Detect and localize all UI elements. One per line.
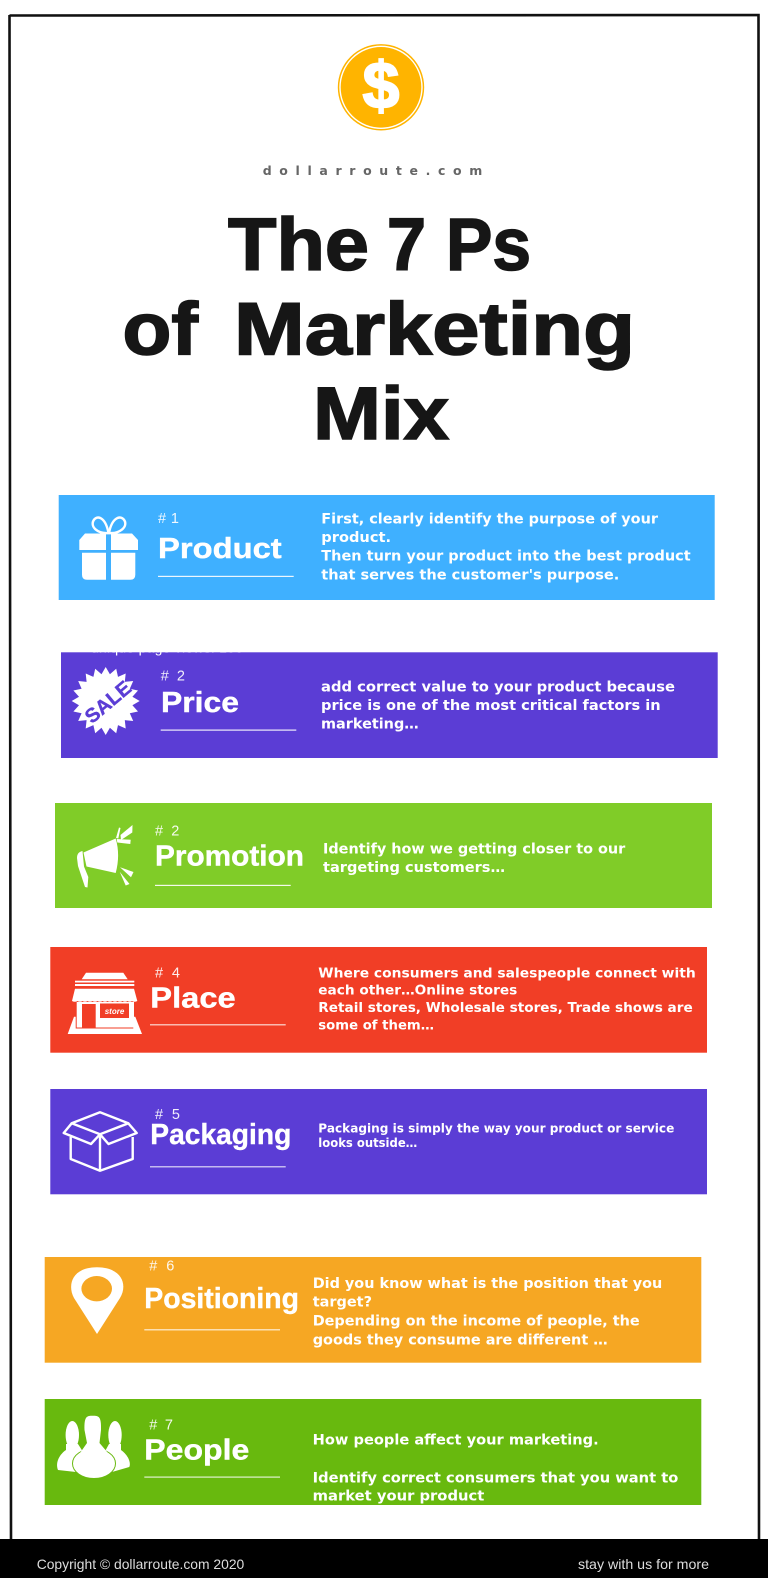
title: The — [228, 203, 369, 286]
text: place description: some of them… — [318, 1017, 434, 1033]
text: product description: Then turn your product into the best product — [321, 549, 691, 565]
text: promotion description: targeting customers… — [323, 860, 505, 876]
heading: Promotion: Promotion — [155, 841, 304, 873]
underline — [155, 885, 291, 886]
panel: People — [45, 1399, 701, 1505]
icon: group of people — [57, 1416, 130, 1478]
icon: map pin — [71, 1267, 123, 1334]
text: positioning description: goods they consume are different … — [313, 1332, 608, 1348]
panel: Product — [59, 495, 715, 600]
icon: sale badge: SALE — [81, 677, 136, 728]
heading: People: People — [144, 1434, 249, 1466]
clipped fragment of text at panel top: unique page views: 100 — [91, 640, 243, 656]
text: product description — [321, 511, 691, 583]
underline — [158, 576, 294, 577]
copyright: Copyright © dollarroute.com 2020 — [37, 1556, 245, 1572]
footer call to action: stay with us for more — [578, 1556, 709, 1572]
icon: store: store — [105, 1007, 125, 1016]
text: positioning description: Did you know what is the position that you — [313, 1276, 662, 1292]
text: place description: Where consumers and salespeople connect with — [318, 965, 696, 981]
title — [122, 203, 635, 455]
panel: Positioning — [45, 1257, 701, 1363]
text: place description — [318, 965, 696, 1033]
text: people description — [313, 1433, 678, 1505]
text: packaging description: Packaging is simply the way your product or service — [318, 1121, 674, 1135]
label: number 5: # 5 — [155, 1107, 180, 1123]
text: place description: each other…Online stores — [318, 983, 517, 999]
heading: Positioning: Positioning — [144, 1283, 299, 1315]
text: positioning description — [313, 1276, 662, 1348]
icon: megaphone — [77, 825, 134, 888]
icon: open box — [64, 1112, 137, 1171]
footer bar — [0, 1539, 768, 1578]
text: packaging description: looks outside… — [318, 1136, 417, 1150]
text: positioning description: target? — [313, 1295, 372, 1311]
logo: dollar coin: $ — [363, 48, 399, 122]
text: promotion description: Identify how we getting closer to our — [323, 841, 626, 857]
heading: Price: Price — [161, 687, 239, 719]
title: Marketing — [234, 288, 635, 370]
text: people description: How people affect your marketing. — [313, 1433, 599, 1449]
text: people description: market your product — [313, 1489, 484, 1505]
logo: dollar coin — [338, 44, 424, 130]
icon: gift box — [79, 518, 138, 580]
text: price description: marketing… — [321, 717, 419, 733]
panel: Price — [61, 640, 718, 758]
icon: sale badge — [72, 667, 140, 735]
heading: Packaging: Packaging — [150, 1119, 291, 1151]
label: number 1: # 1 — [158, 511, 179, 527]
text: price description: price is one of the most critical factors in — [321, 698, 661, 714]
site name: dollarroute.com — [263, 163, 482, 178]
text: positioning description: Depending on the income of people, the — [313, 1314, 640, 1330]
icon: store — [68, 973, 142, 1034]
panel: Packaging — [50, 1089, 707, 1194]
text: product description: product. — [321, 530, 391, 546]
text: price description — [321, 679, 675, 733]
underline — [150, 1166, 286, 1167]
underline — [144, 1329, 280, 1330]
title: of — [122, 288, 198, 370]
label: number 2: # 2 — [155, 824, 179, 840]
title: Mix — [313, 372, 449, 455]
text: promotion description — [323, 841, 626, 876]
label: number 7: # 7 — [149, 1417, 173, 1433]
label: number 4: # 4 — [155, 965, 180, 981]
text: packaging description — [318, 1121, 674, 1150]
title: Ps — [446, 203, 531, 286]
heading: Place: Place — [150, 982, 236, 1014]
underline — [144, 1476, 280, 1478]
heading: Product: Product — [158, 533, 282, 565]
text: product description: First, clearly identify the purpose of your — [321, 511, 659, 527]
label: number 2: # 2 — [161, 668, 185, 684]
underline — [161, 730, 296, 731]
panel: Place — [50, 947, 707, 1053]
label: number 6: # 6 — [149, 1259, 174, 1275]
text: price description: add correct value to your product because — [321, 679, 675, 695]
title: 7 — [387, 203, 426, 286]
text: product description: that serves the customer's purpose. — [321, 567, 619, 583]
text: people description: Identify correct consumers that you want to — [313, 1470, 678, 1486]
panel: Promotion — [55, 803, 712, 908]
underline — [150, 1024, 286, 1025]
text: place description: Retail stores, Wholesale stores, Trade shows are — [318, 1000, 693, 1016]
